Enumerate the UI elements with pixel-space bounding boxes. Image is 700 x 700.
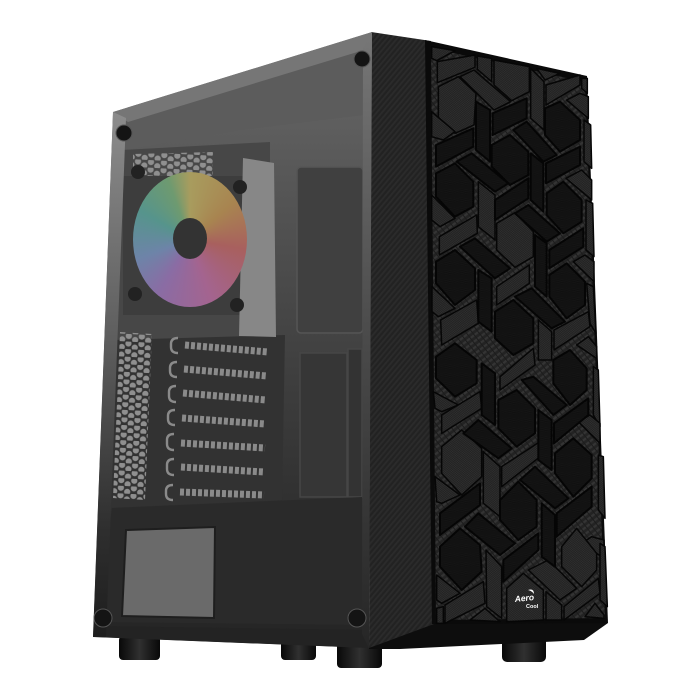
lower mesh openings [436,343,592,590]
carbon base [431,48,605,620]
fan bracket frame [123,176,243,315]
PSU window [122,527,215,618]
bottom rail [96,637,337,647]
PSU shroud [344,497,362,498]
CPU fan with RGB ring [125,165,255,315]
right glass strip [362,33,372,594]
upper mesh openings [436,98,585,355]
top vent band [276,52,363,78]
front panel: carbon base, grooves and mesh [431,47,607,623]
hex vent left of slots [113,332,152,500]
expansion slot holes [180,345,268,495]
hex vent above fan [133,152,213,176]
left glass strip [93,112,126,637]
motherboard tray [122,142,270,242]
side carbon panel [369,32,434,648]
case feet [119,635,546,668]
thumbscrews [94,51,370,627]
lower right plate [300,353,347,497]
logo: AeroCool: Cool [526,604,539,610]
base of case [369,623,608,649]
logo: AeroCool [513,590,539,610]
lower carbon pieces [433,348,607,623]
lower interior [115,335,285,416]
fan mount screws [128,165,247,312]
fan hub [173,218,207,259]
upper right drive plate [297,167,363,333]
top rail [113,32,372,122]
product illustration: PC tower case [93,32,608,668]
case interior seen through glass [93,32,372,648]
front fascia frame [425,40,608,624]
grey bar beside fan [239,158,276,337]
expansion slot hooks [166,338,178,500]
logo: AeroCool: Aero [513,592,534,604]
lower right narrow plate [348,349,362,497]
upper carbon pieces [432,47,597,360]
tempered glass side panel [93,32,372,648]
